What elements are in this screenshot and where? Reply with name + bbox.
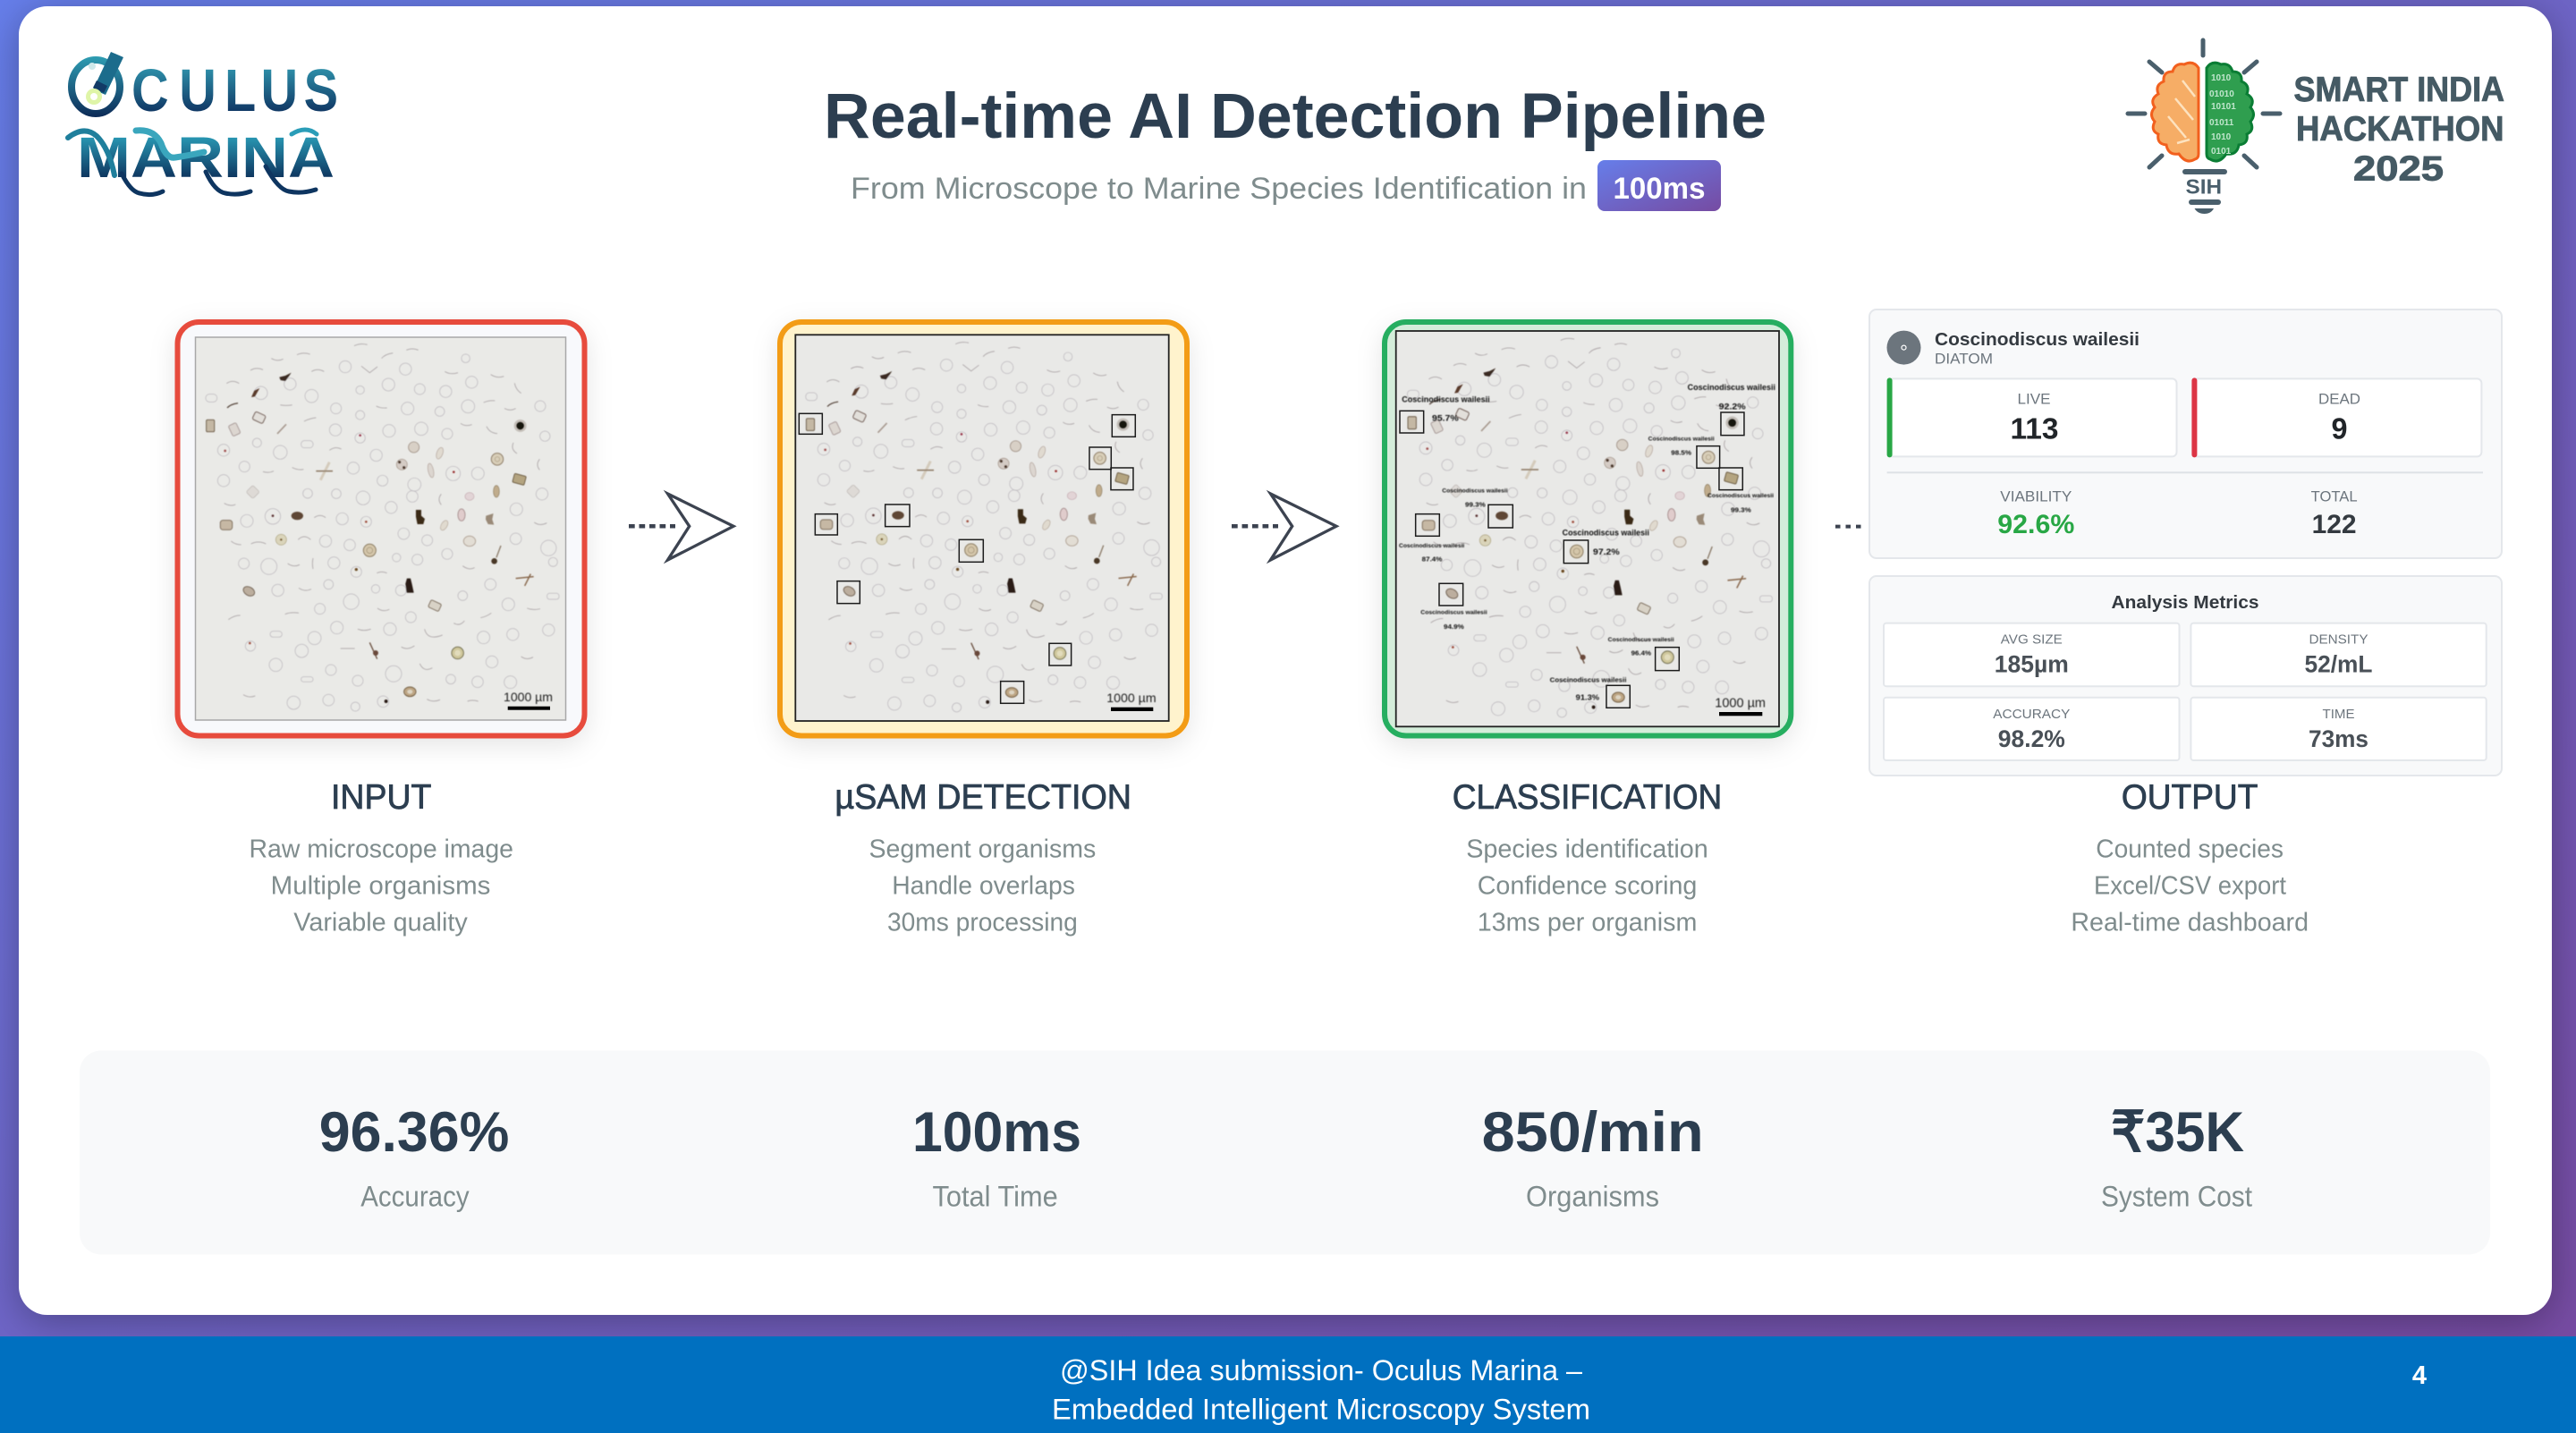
metric: accuracy: ACCURACY: [1993, 707, 2070, 722]
stat: total time: [912, 1101, 1081, 1212]
stat: total: 122: [2312, 510, 2357, 539]
arrow: input to detection: [629, 494, 733, 560]
classified microscope image: 1000 µm: [1715, 697, 1766, 711]
stage caption: input: [249, 778, 513, 937]
wordmark: MARINA: MARINA: [77, 125, 335, 190]
stat: organisms: [1482, 1101, 1704, 1212]
stat: system cost: ₹35K: [2111, 1101, 2244, 1164]
metric: average size: [1884, 623, 2179, 686]
metric: density: 52/mL: [2304, 650, 2372, 677]
stat: accuracy: Accuracy: [360, 1180, 470, 1212]
species labels and confidence: Coscinodiscus wailesii: [1707, 493, 1774, 499]
species labels and confidence: Coscinodiscus wailesii: [1402, 394, 1490, 403]
heading: analysis metrics: Analysis Metrics: [2111, 593, 2259, 613]
stage caption: detection: Segment organisms: [869, 835, 1096, 863]
stage caption: classification: Confidence scoring: [1478, 871, 1697, 900]
icon: brain right binary hemisphere: 1010: [2211, 132, 2232, 142]
panel: analysis metrics: [1869, 576, 2502, 776]
stat: accuracy: 96.36%: [319, 1101, 509, 1164]
species labels and confidence: 98.5%: [1671, 450, 1692, 456]
segmented microscope image: [795, 335, 1169, 721]
species labels and confidence: Coscinodiscus wailesii: [1399, 543, 1464, 549]
stat: dead count: [2191, 377, 2481, 457]
stage caption: output: [2071, 778, 2309, 937]
stat: live count: 113: [2011, 411, 2059, 445]
panel: summary stats: [80, 1050, 2490, 1254]
metric: density: [2190, 623, 2487, 686]
stat: viability: [1997, 488, 2074, 539]
icon: microscope ring: [72, 52, 123, 114]
species labels and confidence: 97.2%: [1593, 547, 1620, 557]
species labels and confidence: 94.9%: [1444, 624, 1465, 631]
icon: brain right binary hemisphere: 0101: [2211, 147, 2232, 157]
stage caption: output: Real-time dashboard: [2071, 909, 2309, 937]
species labels and confidence: 95.7%: [1432, 414, 1459, 424]
panel: detection: [780, 322, 1187, 735]
wordmark: Smart India Hackathon 2025: SMART INDIA: [2293, 71, 2504, 109]
species labels and confidence: 99.3%: [1731, 507, 1752, 513]
icon: diatom avatar: [1887, 331, 1921, 365]
stat: total time: Total Time: [932, 1180, 1058, 1212]
metric: density: DENSITY: [2309, 632, 2368, 648]
stat: organisms: Organisms: [1526, 1180, 1659, 1212]
logo: Oculus Marina: [68, 52, 338, 195]
stat: system cost: [2101, 1101, 2252, 1212]
page number: 4: [2412, 1361, 2427, 1390]
icon: brain right binary hemisphere: 01010: [2209, 89, 2234, 99]
badge: 100ms: [1597, 160, 1721, 211]
stat: total: TOTAL: [2311, 488, 2358, 505]
metric: average size: AVG SIZE: [2001, 632, 2063, 648]
panel: output species result: [1869, 309, 2502, 558]
detection boxes: [799, 413, 1135, 703]
classified microscope image: [1396, 331, 1779, 726]
species labels and confidence: Coscinodiscus wailesii: [1688, 383, 1775, 392]
arrow: classification to output: [1835, 525, 1861, 529]
segmented microscope image: 1000 µm: [1106, 691, 1157, 705]
species labels and confidence: 91.3%: [1576, 692, 1600, 701]
stat: live count: LIVE: [2018, 390, 2050, 407]
classification boxes: [1400, 411, 1744, 708]
footer bar: [0, 1336, 2576, 1433]
species labels and confidence: Coscinodiscus wailesii: [1608, 637, 1674, 643]
icon: lightbulb rays: [2128, 40, 2280, 167]
wordmark: Smart India Hackathon 2025: 2025: [2353, 150, 2444, 188]
wordmark: Smart India Hackathon 2025: HACKATHON: [2296, 110, 2504, 148]
species labels and confidence: 87.4%: [1422, 557, 1443, 564]
species labels and confidence: Coscinodiscus wailesii: [1420, 610, 1487, 616]
metric: time: 73ms: [2309, 725, 2368, 752]
panel: input microscope image: [177, 322, 585, 735]
species labels and confidence: Coscinodiscus wailesii: [1550, 676, 1626, 684]
stage caption: output: Excel/CSV export: [2094, 871, 2286, 900]
stage caption: classification: [1453, 778, 1722, 937]
raw microscope image: 1000 µm: [504, 690, 553, 704]
icon: bulb base with SIH: [2182, 169, 2227, 214]
icon: brain right binary hemisphere: 1010: [2211, 73, 2232, 83]
icon: brain left circuit hemisphere: [2152, 63, 2199, 161]
stat: dead count: 9: [2331, 411, 2347, 445]
logo: Smart India Hackathon 2025: [2128, 40, 2504, 214]
species labels and confidence: 96.4%: [1631, 650, 1652, 657]
stage caption: classification: 13ms per organism: [1478, 909, 1697, 937]
metric: average size: 185µm: [1995, 650, 2069, 677]
stat: live count: [1887, 377, 2177, 457]
stat: viability: VIABILITY: [2000, 488, 2072, 505]
icon: tentacle swashes: [68, 130, 317, 195]
stat: viability: 92.6%: [1997, 510, 2074, 539]
stat: total: [2311, 488, 2358, 539]
metric: time: [2190, 698, 2487, 760]
arrow: detection to classification: [1232, 494, 1336, 560]
stage caption: classification: CLASSIFICATION: [1453, 778, 1722, 817]
species labels and confidence: Coscinodiscus wailesii: [1442, 488, 1508, 495]
metric: accuracy: [1884, 698, 2179, 760]
stage caption: detection: Handle overlaps: [892, 871, 1075, 900]
species labels and confidence: 99.3%: [1465, 503, 1487, 509]
stat: dead count: DEAD: [2318, 390, 2360, 407]
species name: Coscinodiscus wailesii: [1935, 329, 2140, 350]
species type: DIATOM: [1935, 351, 1993, 367]
icon: brain right binary hemisphere: 01011: [2209, 118, 2234, 128]
icon: brain right binary hemisphere: [2207, 63, 2254, 161]
metric: time: TIME: [2322, 707, 2354, 722]
stage caption: detection: [835, 778, 1131, 937]
wordmark: CULUS: CULUS: [131, 57, 338, 124]
raw microscope image: [195, 337, 565, 720]
title: Real-time AI Detection Pipeline: [824, 81, 1767, 152]
stat: accuracy: [319, 1101, 509, 1212]
species labels and confidence: Coscinodiscus wailesii: [1563, 529, 1649, 538]
stage caption: input: INPUT: [331, 778, 431, 817]
species labels and confidence: Coscinodiscus wailesii: [1648, 437, 1715, 443]
stage caption: detection: 30ms processing: [887, 909, 1078, 937]
stage caption: classification: Species identification: [1466, 835, 1708, 863]
stat: system cost: System Cost: [2101, 1180, 2252, 1212]
stage caption: input: Multiple organisms: [271, 871, 490, 900]
stage caption: detection: µSAM DETECTION: [835, 778, 1131, 817]
icon: bulb base with SIH: SIH: [2186, 175, 2222, 199]
stage caption: input: Raw microscope image: [249, 835, 513, 863]
species labels and confidence: 92.2%: [1719, 402, 1746, 411]
metric: accuracy: 98.2%: [1998, 725, 2065, 752]
stat: total time: 100ms: [912, 1101, 1081, 1164]
panel: classification: [1385, 322, 1791, 735]
stat: organisms: 850/min: [1482, 1101, 1704, 1164]
stage caption: output: Counted species: [2096, 835, 2284, 863]
badge: 100ms: 100ms: [1614, 172, 1705, 206]
species labels and confidence: [1399, 383, 1775, 701]
subtitle: From Microscope to Marine Species Identification in: [851, 172, 1587, 206]
footer text: @SIH Idea submission- Oculus Marina –: [1060, 1354, 1582, 1386]
icon: brain right binary hemisphere: 10101: [2211, 102, 2236, 112]
stage caption: output: OUTPUT: [2122, 778, 2258, 817]
footer text: Embedded Intelligent Microscopy System: [1052, 1394, 1590, 1426]
stage caption: input: Variable quality: [293, 909, 468, 937]
